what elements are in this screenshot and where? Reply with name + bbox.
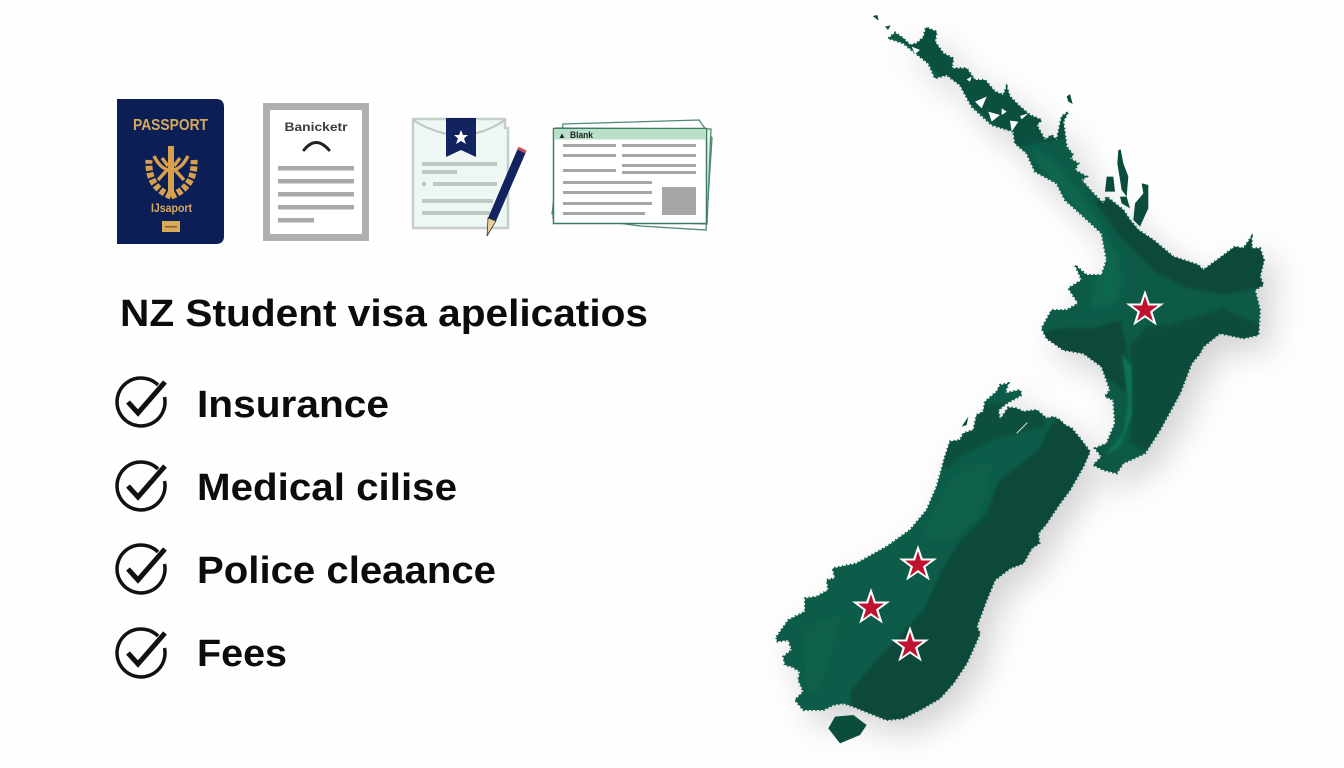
map: New Zealand: [777, 0, 1287, 743]
icon: stacked forms: [552, 120, 712, 230]
south island: [777, 383, 1107, 743]
north island: [860, 0, 1287, 473]
star: south 3: [891, 626, 929, 662]
icon: passport: IJsaport: [151, 203, 192, 215]
item: police: [117, 545, 496, 593]
item: insurance: [117, 378, 389, 426]
icon: passport: [117, 99, 224, 244]
stewart island: [828, 715, 867, 743]
icon: stacked forms: ▲: [558, 131, 566, 140]
stars: [852, 290, 1164, 662]
item: medical: [117, 462, 457, 510]
item: medical: Medical cilise: [197, 467, 457, 509]
checklist: [117, 378, 496, 677]
star: south 1: [899, 545, 937, 580]
emblem: [149, 146, 194, 196]
item: fees: Fees: [197, 633, 287, 675]
item: police: Police cleaance: [197, 550, 496, 592]
northland inlets: [912, 47, 1028, 132]
star: north: [1126, 290, 1164, 326]
icon: stacked forms: Blank: [570, 130, 594, 140]
icon: passport: PASSPORT: [133, 117, 208, 134]
pencil: [487, 148, 526, 236]
icon: document: [266, 106, 366, 238]
star: south 2: [852, 588, 890, 624]
item: insurance: Insurance: [197, 384, 389, 426]
heading: NZ Student visa apelicatios: [120, 293, 648, 335]
icon: certificate with ribbon and pencil: [413, 118, 526, 236]
item: fees: [117, 629, 287, 677]
icon: document: Banicketr: [284, 122, 348, 134]
chip: [162, 221, 180, 232]
offshore islands: [873, 15, 1148, 227]
